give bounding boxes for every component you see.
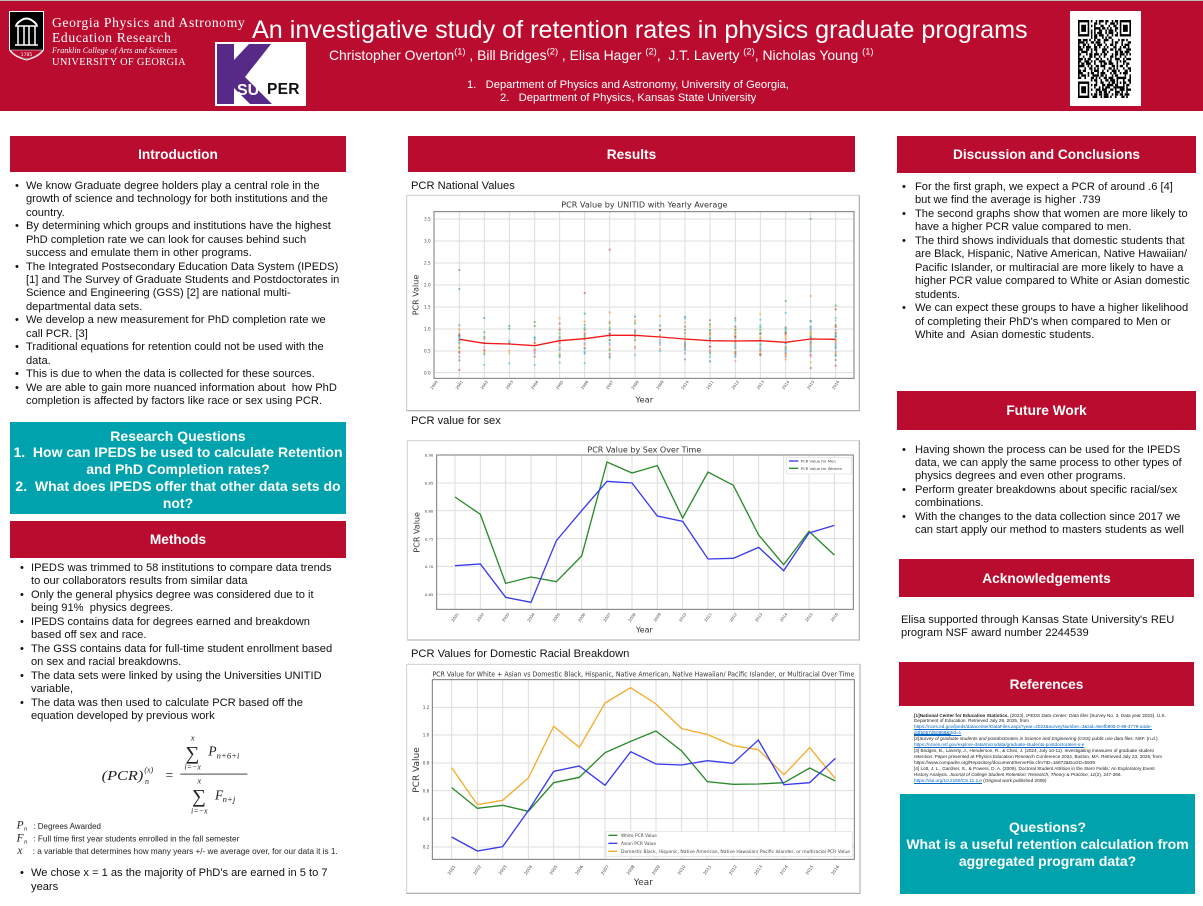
callout: research questions (10, 422, 346, 514)
text block: references: [1]National Center for Education Statistics. (2023). IPEDS Data Center: Data files (Survey No. 3, Data year 2023). U.S. (914, 712, 1166, 718)
y axis tick labels (425, 453, 434, 597)
equation: PCR formula and variable definitions: n (24, 826, 28, 833)
text block: discussion bullets: White and Asian domestic students. (915, 329, 1094, 341)
heading: PCR value for sex: PCR value for sex (411, 414, 501, 426)
text block: methods bullets: on sex and racial breakdowns. (31, 656, 181, 668)
heading: Future Work (897, 391, 1196, 430)
y axis tick labels (423, 705, 430, 850)
callout: research questions: Research Questions (110, 428, 246, 444)
equation: PCR formula and variable definitions: x (190, 733, 195, 743)
x axis tick labels: 2009 (655, 379, 665, 390)
text block: references: https://doi.org/10.2190/CS.11.2.e (Original work published 2009) (914, 778, 1046, 783)
y axis title: PCR Value (412, 747, 422, 793)
icon: QR code (1070, 11, 1141, 106)
legend: PCR Value for Men (801, 459, 836, 464)
equation: PCR formula and variable definitions: : Degrees Awarded (33, 821, 101, 831)
y axis tick labels: 1.0 (423, 733, 430, 738)
equation: PCR formula and variable definitions: : a variable that determines how many years +/- we average over, for our data it is 1. (33, 846, 338, 856)
equation: PCR formula and variable definitions: n (24, 838, 28, 845)
line: women (455, 462, 834, 583)
equation: PCR formula and variable definitions: = (166, 767, 173, 782)
chart title: PCR Value for White + Asian vs Domestic Black, Hispanic, Native American, Native Hawaiian/ Pacific Islander, or Multiracial Over Time (432, 671, 854, 679)
equation: PCR formula and variable definitions: ∑ (185, 743, 199, 764)
y axis tick labels: 0.5 (424, 349, 431, 354)
text block: methods bullets: IPEDS was trimmed to 58 institutions to compare data trends (31, 562, 332, 574)
text block: future work bullets: data, we can apply the same process to other types of (915, 457, 1182, 469)
equation: PCR formula and variable definitions: P (16, 820, 24, 832)
text block: references: retention. Paper presented at Physics Education Research Conference 2024, Boston, MA. Retrieved July 23, 2025, from (914, 754, 1162, 759)
line chart: PCR value by sex over time (406, 440, 860, 640)
callout: closing question: aggregated program data? (959, 853, 1136, 869)
y axis tick labels: 0.6 (423, 788, 430, 793)
text block: introduction bullets: Traditional equations for retention could not be used with the (26, 341, 324, 353)
KSUPER logo (215, 42, 306, 106)
UGA department wordmark (52, 15, 245, 68)
line: men (455, 481, 834, 602)
text block: introduction bullets: We know Graduate degree holders play a central role in the (26, 180, 320, 192)
UGA department wordmark: Education Research (52, 30, 172, 45)
heading: PCR Values for Domestic Racial Breakdown: PCR Values for Domestic Racial Breakdown (411, 648, 629, 660)
y axis title: PCR Value (411, 275, 420, 315)
callout: closing question (900, 794, 1195, 894)
text block: introduction bullets: This is due to when the data is collected for these sources. (26, 368, 315, 380)
text block: references: Department of Education. Retrieved July 29, 2025, from (914, 718, 1029, 723)
x axis tick labels: 2008 (625, 864, 636, 876)
x axis tick labels (429, 379, 841, 390)
x axis tick labels: 2002 (475, 611, 485, 623)
text block: acknowledgements: program NSF award number 2244539 (901, 627, 1089, 639)
UGA department wordmark: Franklin College of Arts and Sciences (52, 46, 177, 55)
x axis tick labels: 2015 (806, 379, 816, 390)
x axis tick labels: 2011 (702, 864, 712, 876)
text block: references: https://ncses.nsf.gov/explore-data/microdata/graduate-students-postdoctorates-s-e (914, 742, 1084, 747)
title: An investigative study of retention rates in physics graduate programs (252, 16, 1028, 44)
text block: methods bullets: to our collaborators results from similar data (31, 575, 247, 587)
y axis tick labels: 0.90 (425, 453, 434, 458)
heading: Methods: Methods (150, 532, 206, 547)
text block: discussion bullets: Pacific Islander, or multiracial are more likely to have a (915, 262, 1183, 274)
equation: PCR formula and variable definitions: i=−x (191, 806, 208, 815)
text block: methods bullets: variable, (31, 683, 73, 695)
x axis tick labels: 2007 (605, 379, 615, 390)
text block: introduction bullets: We are able to gain more nuanced information about how PhD (26, 382, 337, 394)
chart title: PCR Value by Sex Over Time (587, 445, 701, 454)
x axis tick labels: 2009 (651, 864, 661, 876)
x axis tick labels: 2010 (678, 611, 688, 623)
text block: future work bullets: Perform greater breakdowns about specific racial/sex (915, 484, 1177, 496)
legend: Asian PCR Value (621, 841, 656, 847)
y axis tick labels: 3.5 (424, 217, 431, 222)
scatter points by institution (459, 219, 836, 370)
y axis tick labels: 0.75 (425, 536, 434, 541)
text block: acknowledgements: Elisa supported through Kansas State University's REU (901, 614, 1174, 626)
text block: discussion bullets: are Black, Hispanic, Native American, Native Hawaiian/ (915, 248, 1187, 260)
y axis tick labels (424, 217, 431, 375)
y axis tick labels: 0.4 (423, 816, 430, 821)
text block: introduction bullets: We develop a new measurement for PhD completion rate we (26, 314, 326, 326)
equation: PCR formula and variable definitions: x (16, 845, 22, 857)
y axis tick labels: 2.0 (424, 283, 431, 288)
icon: University of Georgia arch shield: 1785 (21, 52, 32, 58)
x axis tick labels: 2000 (429, 379, 439, 390)
heading: Discussion and Conclusions: Discussion and Conclusions (953, 147, 1140, 162)
y axis tick labels: 1.0 (424, 327, 431, 332)
text block: introduction bullets: data. (26, 355, 51, 367)
x axis tick labels: 2002 (472, 864, 482, 876)
text block: references: https://nces.ed.gov/ipeds/datacenter/DataFiles.aspx?year=2023&surveyNumber=3&sid=9eefb905-0-99-4779-a4de- (914, 724, 1152, 729)
line: asian (452, 740, 835, 851)
text block: references (914, 712, 1166, 784)
heading: Introduction: Introduction (138, 146, 218, 162)
heading: Methods (10, 521, 346, 558)
heading: References (899, 662, 1194, 706)
x axis tick labels: 2016 (831, 379, 841, 390)
x axis tick labels: 2006 (577, 611, 587, 623)
text block: future work bullets (902, 444, 1184, 536)
callout: closing question: What is a useful retention calculation from (906, 836, 1189, 852)
x axis tick labels: 2009 (652, 611, 662, 623)
text block: methods bullets: The data was then used to calculate PCR based off the (31, 697, 303, 709)
text block: methods bullets: The data sets were linked by using the Universities UNITID (31, 670, 322, 682)
x axis tick labels: 2004 (530, 379, 540, 390)
authors: Christopher Overton(1) , Bill Bridges(2) , Elisa Hager (2), J.T. Laverty (2), Nicholas Young (1) (329, 45, 874, 63)
line: domestic underrepresented groups (452, 688, 835, 805)
UGA department wordmark: UNIVERSITY OF GEORGIA (52, 57, 186, 68)
text block: introduction bullets: By determining which groups and institutions have the highest (26, 220, 331, 232)
KSUPER logo: PER (267, 81, 300, 98)
text block: discussion bullets: The second graphs show that women are more likely to (915, 208, 1188, 220)
x axis tick labels: 2013 (753, 864, 763, 876)
text block: introduction bullets: [1] and The Survey of Graduate Students and Postdoctorates in (26, 274, 339, 286)
text block: references: d4f5057d50868&rtid=1 (914, 730, 961, 735)
text block: introduction bullets: The Integrated Postsecondary Education Data System (IPEDS) (26, 261, 338, 273)
x axis tick labels: 2011 (703, 611, 713, 623)
chart title: PCR Value by UNITID with Yearly Average (561, 200, 727, 210)
equation: PCR formula and variable definitions: F (16, 832, 25, 844)
x axis tick labels: 2016 (830, 864, 840, 876)
x axis tick labels: 2005 (555, 379, 565, 390)
x axis tick labels: 2015 (804, 611, 814, 623)
equation: PCR formula and variable definitions: : Full time first year students enrolled in the fall semester (33, 834, 240, 844)
affiliations (467, 79, 789, 104)
legend: Domestic Black, Hispanic, Native American, Native Hawaiian/ Pacific Islander, or multiracial PCR Value (621, 849, 850, 855)
line chart: PCR by racial breakdown over time (406, 664, 860, 894)
x axis title: Year (635, 394, 654, 404)
yearly average line (459, 335, 836, 346)
heading: Acknowledgements (899, 559, 1194, 597)
equation: PCR formula and variable definitions (16, 733, 338, 857)
x axis tick labels: 2012 (730, 379, 740, 390)
heading: Introduction (10, 136, 346, 172)
heading: PCR National Values: PCR National Values (411, 180, 515, 192)
x axis tick labels: 2008 (627, 611, 637, 623)
y axis tick labels: 0.2 (423, 845, 430, 850)
header banner (0, 1, 1203, 111)
text block: references: https://www.compadre.org/Repository/document/ServeFile.cfm?ID=16872&DocID=5939 (914, 760, 1095, 765)
equation: PCR formula and variable definitions: n+6+i (217, 750, 240, 760)
text block: future work bullets: combinations. (915, 497, 984, 509)
heading: Results (408, 136, 855, 172)
x axis tick labels: 2014 (779, 864, 789, 876)
text block: methods bullets: equation developed by previous work (31, 710, 215, 722)
text block: references: [3] Bridges, B., Laverty, J., Henderson, R., & Chini, J. (2024, July 10-11). Investigating measures of graduate student (914, 748, 1154, 753)
text block: introduction bullets: success and emulate them in other programs. (26, 247, 252, 259)
equation: PCR formula and variable definitions: x (196, 776, 201, 786)
equation: PCR formula and variable definitions: n (145, 777, 149, 786)
text block: introduction bullets: departmental data sets. (26, 301, 142, 313)
x axis tick labels: 2015 (804, 864, 815, 876)
equation: PCR formula and variable definitions: F (214, 787, 224, 802)
text block: methods bullets: based off sex and race. (31, 629, 146, 641)
x axis tick labels (450, 611, 839, 623)
x axis tick labels: 2007 (600, 864, 610, 876)
text block: choice of x: years (31, 881, 58, 893)
x axis tick labels: 2006 (580, 379, 590, 390)
y axis title: PCR Value (413, 512, 422, 553)
heading: Results: Results (607, 146, 656, 162)
callout: research questions: 1. How can IPEDS be used to calculate Retention (13, 444, 343, 460)
equation: PCR formula and variable definitions: ∑ (192, 787, 206, 808)
legend (787, 457, 852, 474)
text block: discussion bullets: have a higher PCR value compared to men. (915, 221, 1131, 233)
x axis tick labels: 2004 (523, 864, 533, 876)
text block: acknowledgements (901, 614, 1174, 639)
text block: discussion bullets (902, 181, 1190, 341)
text block: future work bullets: physics degrees and even other programs. (915, 470, 1126, 482)
x axis tick labels: 2001 (446, 864, 457, 876)
x axis tick labels: 2012 (728, 864, 738, 876)
y axis tick labels: 2.5 (424, 261, 431, 266)
x axis tick labels: 2008 (630, 379, 640, 390)
callout: closing question: Questions? (1009, 819, 1086, 835)
text block: discussion bullets: higher PCR value compared to White or Asian domestic (915, 275, 1190, 287)
affiliations: 2. Department of Physics, Kansas State University (500, 92, 756, 104)
x axis tick labels: 2001 (450, 611, 460, 623)
text block: choice of x: We chose x = 1 as the majority of PhD's are earned in 5 to 7 (31, 867, 328, 879)
y axis tick labels: 0.0 (424, 370, 431, 375)
text block: references: [4] Lott, J. L., Gardner, S., & Powers, D. A. (2009). Doctoral Student Attrition in the Stem Fields: An Exploratory Event (914, 766, 1155, 771)
legend (606, 832, 852, 857)
callout: research questions: not? (163, 495, 193, 511)
x axis tick labels: 2006 (574, 864, 584, 876)
text block: references: History Analysis. Journal of College Student Retention: Research, Theory & Practice, 11(2), 247-266. (914, 772, 1122, 777)
KSUPER logo: SU (237, 82, 259, 99)
callout: research questions: and PhD Completion rates? (86, 461, 270, 477)
callout: research questions: 2. What does IPEDS offer that other data sets do (15, 478, 341, 494)
y axis tick labels: 1.5 (424, 305, 431, 310)
text block: future work bullets: can start apply our method to masters students as well (915, 524, 1184, 536)
y axis tick labels: 0.80 (425, 508, 434, 513)
legend: White PCR Value (621, 833, 657, 839)
text block: introduction bullets: completion is affected by factors like race or sex using PCR. (26, 395, 322, 407)
text block: methods bullets (20, 562, 332, 722)
text block: references: [2]Survey of graduate students and postdoctorates in Science and Engineering (GSS) public use data files. NSF. (n.d.). (914, 736, 1159, 741)
scatter chart: PCR value by UNITID with yearly average (406, 194, 860, 412)
line: white (452, 731, 835, 811)
x axis tick labels: 2014 (781, 379, 791, 390)
text block: methods bullets: Only the general physics degree was considered due to it (31, 589, 314, 601)
equation: PCR formula and variable definitions: i=−x (184, 762, 201, 771)
text block: discussion bullets: The third shows individuals that domestic students that (915, 235, 1185, 247)
text block: introduction bullets: growth of science and technology for both institutions and the (26, 193, 328, 205)
icon: University of Georgia arch shield (9, 11, 44, 60)
y axis tick labels: 0.70 (425, 564, 434, 569)
equation: PCR formula and variable definitions: (x) (144, 765, 154, 774)
text block: future work bullets: Having shown the process can be used for the IPEDS (915, 444, 1180, 456)
x axis tick labels: 2004 (526, 611, 536, 623)
y axis tick labels: 1.2 (423, 705, 430, 710)
x axis tick labels: 2003 (504, 379, 514, 390)
heading: Acknowledgements: Acknowledgements (982, 570, 1111, 586)
y axis tick labels: 0.8 (423, 761, 430, 766)
x axis tick labels: 2011 (705, 379, 715, 390)
text block: choice of x (20, 867, 328, 893)
x axis title: Year (633, 878, 653, 888)
text block: introduction bullets: country. (26, 207, 65, 219)
y axis tick labels: 0.65 (425, 592, 434, 597)
legend: PCR Value for Women (801, 466, 843, 471)
x axis tick labels: 2016 (829, 611, 839, 623)
text block: discussion bullets: We can expect these groups to have a higher likelihood (915, 302, 1188, 314)
x axis tick labels: 2001 (454, 379, 464, 390)
text block: introduction bullets: Science and Engineering (GSS) [2] are national multi- (26, 287, 291, 299)
text block: methods bullets: The GSS contains data for full-time student enrollment based (31, 643, 332, 655)
equation: PCR formula and variable definitions: (PCR) (102, 769, 144, 784)
heading: Future Work: Future Work (1006, 403, 1087, 418)
x axis tick labels: 2014 (779, 611, 789, 623)
x axis tick labels: 2005 (551, 611, 561, 623)
text block: discussion bullets: of completing their PhD's when compared to Men or (915, 316, 1171, 328)
y axis tick labels: 0.85 (425, 481, 434, 486)
text block: introduction bullets (15, 180, 339, 407)
text block: discussion bullets: but we find the average is higher .739 (915, 194, 1101, 206)
x axis tick labels: 2005 (548, 864, 559, 876)
x axis tick labels: 2010 (680, 379, 690, 390)
x axis tick labels (446, 864, 840, 876)
text block: methods bullets: IPEDS contains data for degrees earned and breakdown (31, 616, 310, 628)
x axis tick labels: 2013 (755, 379, 765, 390)
heading: References: References (1010, 676, 1083, 692)
text block: discussion bullets: For the first graph, we expect a PCR of around .6 [4] (915, 181, 1173, 193)
x axis tick labels: 2003 (497, 864, 508, 876)
x axis title: Year (635, 625, 654, 634)
text block: introduction bullets: call PCR. [3] (26, 328, 88, 340)
x axis tick labels: 2010 (676, 864, 687, 876)
equation: PCR formula and variable definitions: n+j (223, 794, 236, 804)
affiliations: 1. Department of Physics and Astronomy, University of Georgia, (467, 79, 789, 91)
x axis tick labels: 2012 (728, 611, 738, 623)
text block: introduction bullets: PhD completion rate we can look for causes behind such (26, 234, 306, 246)
y axis tick labels: 3.0 (424, 239, 431, 244)
text block: future work bullets: With the changes to the data collection since 2017 we (915, 511, 1180, 523)
x axis tick labels: 2002 (479, 379, 489, 390)
x axis tick labels: 2013 (754, 611, 764, 623)
heading: Discussion and Conclusions (897, 136, 1196, 173)
text block: discussion bullets: students. (915, 289, 960, 301)
x axis tick labels: 2003 (501, 611, 511, 623)
equation: PCR formula and variable definitions: P (207, 743, 216, 758)
text block: methods bullets: being 91% physics degrees. (31, 602, 173, 614)
x axis tick labels: 2007 (602, 611, 612, 623)
UGA department wordmark: Georgia Physics and Astronomy (52, 15, 245, 30)
